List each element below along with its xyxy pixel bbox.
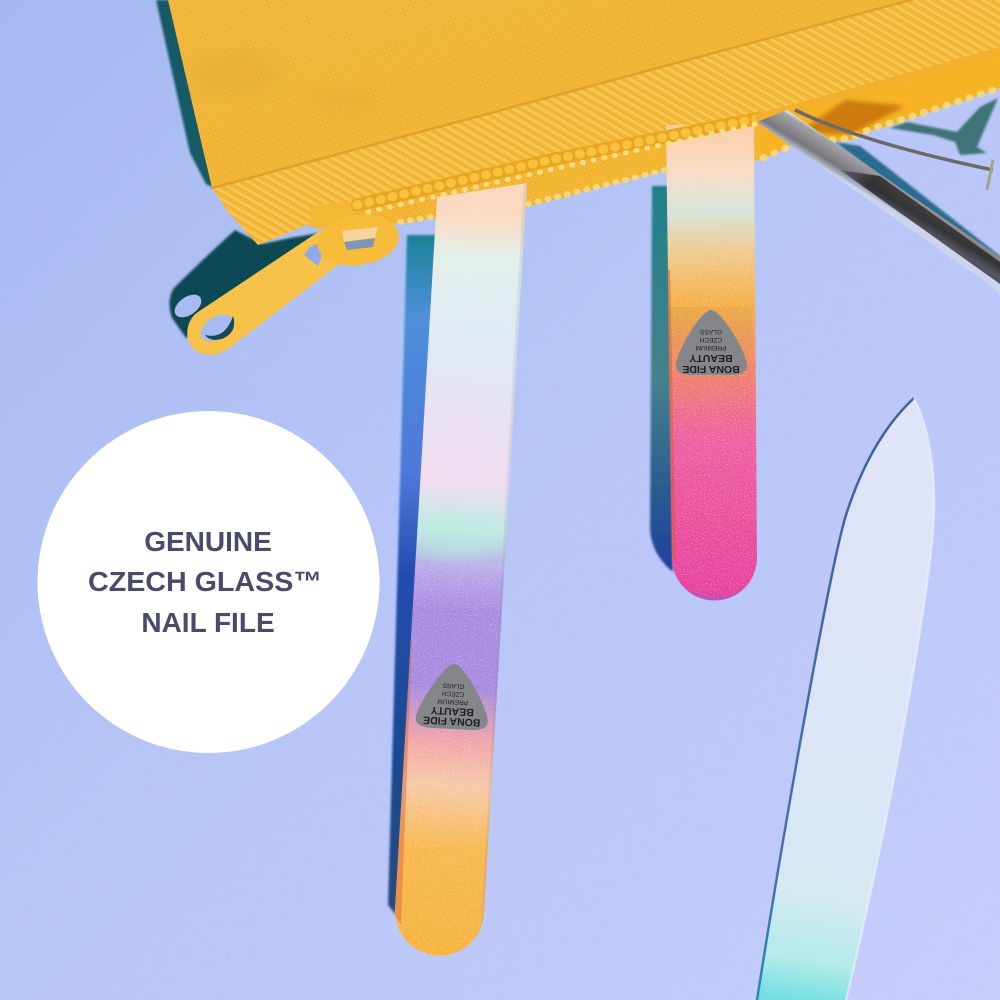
nail file: short orange to pink (660, 125, 760, 605)
metal badge: BONA FIDE (423, 713, 481, 728)
metal badge (676, 310, 747, 375)
seam stitching (212, 0, 1000, 188)
metal badge: BONA FIDE (682, 363, 740, 375)
metal badge: CZECH (700, 336, 722, 343)
zipper teeth (357, 52, 1000, 222)
heading: product title: CZECH GLASS™ (88, 566, 322, 597)
zipper pull (187, 201, 402, 355)
heading: product title (88, 526, 322, 638)
metal badge: GLASS (700, 328, 722, 335)
metal badge: PREMIUM (696, 344, 726, 351)
nail file: long pastel gradient (390, 183, 530, 965)
callout circle with heading (38, 411, 380, 753)
metal badge: PREMIUM (437, 697, 468, 706)
metal badge: BEAUTY (430, 704, 474, 718)
heading: product title: NAIL FILE (141, 607, 275, 638)
metal badge: CZECH (442, 689, 465, 698)
metal badge (415, 662, 491, 731)
shadows on the paper (156, 0, 1000, 915)
heading: product title: GENUINE (144, 526, 272, 557)
scissors (757, 110, 1000, 296)
yellow zipper pouch (168, 0, 1000, 245)
metal badge: GLASS (442, 681, 465, 690)
nail file: frosted blade (757, 398, 934, 1000)
zipper slider and ring (310, 201, 354, 230)
metal badge: BEAUTY (689, 352, 733, 364)
